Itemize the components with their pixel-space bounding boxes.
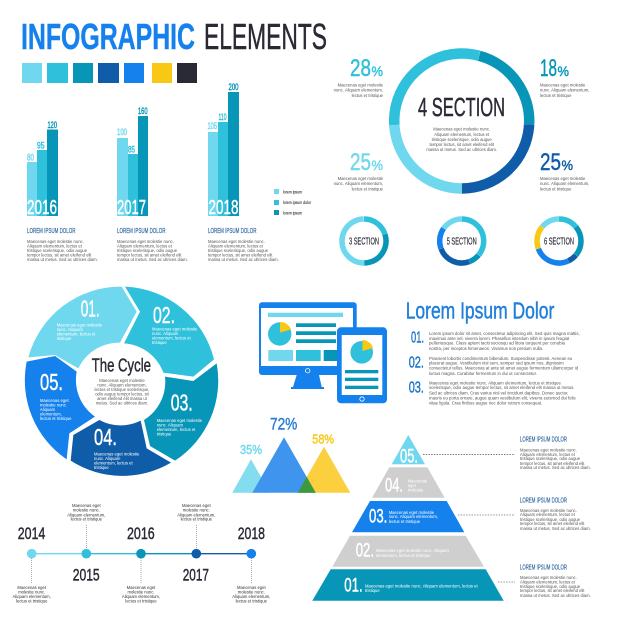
mountain chart: 35%	[240, 442, 262, 457]
donut centre text: tempor lectus, sit amet eleifend elit	[429, 142, 495, 147]
pyramid callout 3: massa ut metus. Sed ac ultrices diam.	[520, 593, 591, 598]
pyramid level 03	[352, 501, 464, 532]
donut centre text: Maecenas eget molestie nunc.	[433, 126, 490, 132]
colour palette swatches	[22, 63, 197, 83]
timeline: Maecenas eget	[17, 585, 47, 590]
timeline: molestie nunc.	[18, 590, 45, 595]
stat: 18%: nunc. Aliquam elementum,	[540, 88, 589, 92]
bar chart: 2016: 2016	[27, 197, 57, 219]
pyramid callout 3: Aliquam elementum, lectus et	[520, 580, 576, 584]
bar chart captions: tempor lectus, sit amet eleifend elit	[27, 252, 92, 258]
stat: 28%: 28	[350, 55, 371, 82]
numbered list: vitae ligula. Cras finibus augue nec dolor rutrum consequat.	[429, 400, 542, 406]
numbered list: scelerisque, odio augue tempor lectus, sit amet eleifend elit massa ut metus.	[429, 385, 574, 390]
donut centre text: 4 SECTION	[418, 92, 505, 122]
timeline: Aliquam elementum,	[232, 594, 270, 599]
pyramid callout 2: Maecenas eget molestie nunc.	[520, 508, 577, 513]
numbered list: 02.	[409, 355, 424, 372]
timeline: 2018	[238, 524, 265, 543]
timeline: molestie nunc.	[238, 590, 265, 595]
stat: 25% light: lectus et tristique	[352, 186, 384, 192]
numbered list: Sed ac ultrices diam. Cras varius nisl vel tincidunt dapibus. Donec auctor,	[429, 390, 568, 396]
stat: 18%: lectus et tristique	[540, 93, 572, 98]
chart legend: lorem ipsum dolor	[283, 200, 311, 205]
stat: 28%: nunc. Aliquam elementum,	[334, 88, 383, 92]
stat: 25% light	[334, 149, 384, 192]
cycle centre: metus. Sed ac ultrices diam.	[96, 400, 148, 406]
timeline: molestie nunc.	[183, 508, 210, 513]
pyramid level 02: Maecenas eget molestie nunc. Aliquam	[376, 548, 449, 553]
cycle centre: odio augue tempor lectus, sit	[95, 392, 150, 396]
timeline: lectus et tristique	[125, 599, 157, 604]
pyramid callout 1	[520, 437, 591, 470]
bar chart: 2016: 95	[37, 140, 44, 150]
stat: 18%	[540, 55, 589, 98]
timeline: molestie nunc.	[73, 508, 100, 513]
timeline: Aliquam elementum,	[13, 594, 51, 599]
cycle segment 01: elementum, lectus et	[57, 332, 96, 336]
pyramid level 04: Maecenas	[408, 478, 427, 484]
icon: desktop monitor	[259, 302, 357, 389]
timeline	[13, 503, 270, 604]
numbered list: luctus magna. Curabitur fermentum in dui ut consectetur.	[429, 371, 537, 376]
timeline: lectus et tristique	[71, 517, 103, 522]
cycle segment 04	[71, 420, 171, 476]
bar chart captions: Aliquam elementum, lectus et	[117, 244, 173, 248]
pyramid callout 1: LOREM IPSUM DOLOR	[520, 437, 567, 444]
stat: 25% dark: lectus et tristique	[540, 186, 572, 192]
bar chart: 2016: 80	[27, 152, 34, 162]
cycle centre: Maecenas eget molestie	[99, 378, 145, 383]
mountain chart: 58%	[312, 431, 334, 446]
numbered list: nostra, per inceptos himenaeos. Vivamus non pretium nulla.	[429, 346, 543, 351]
pyramid level 02	[332, 536, 484, 567]
pyramid level 03: Maecenas eget molestie	[389, 510, 435, 515]
timeline: lectus et tristique	[16, 599, 48, 604]
bar chart captions: Aliquam elementum, lectus et	[208, 244, 264, 248]
numbered list: 01.	[411, 330, 424, 347]
bar chart captions: Maecenas eget molestie nunc.	[27, 239, 84, 244]
timeline: Aliquam elementum,	[122, 594, 160, 599]
bar chart captions: Maecenas eget molestie nunc.	[117, 239, 174, 244]
cycle segment 01: 01.	[81, 296, 100, 322]
bar chart captions: massa ut metus. Sed ac ultrices diam.	[117, 257, 188, 262]
title: ELEMENTS	[204, 16, 327, 57]
cycle segment 05: molestie nunc.	[40, 402, 67, 408]
cycle segment 03: nunc. Aliquam	[157, 422, 184, 428]
cycle segment 03: 03.	[171, 390, 193, 416]
donut chart: 4 section	[379, 38, 544, 204]
bar chart captions: LOREM IPSUM DOLOR	[117, 228, 166, 235]
pyramid callout 3: Maecenas eget molestie nunc.	[520, 575, 577, 580]
mountain chart: 72%	[270, 414, 297, 433]
bar chart captions: tempor lectus, sit amet eleifend elit	[208, 252, 273, 258]
pyramid level 04: molestie	[408, 488, 424, 492]
timeline: molestie nunc.	[128, 590, 154, 595]
bar chart: 2017: 100	[117, 127, 127, 137]
bar chart captions: Aliquam elementum, lectus et	[27, 244, 83, 248]
bar chart captions: LOREM IPSUM DOLOR	[208, 228, 256, 235]
pyramid callout 3	[520, 564, 591, 598]
cycle diagram	[25, 287, 218, 476]
bar chart: 2018: 200	[228, 82, 238, 92]
cycle segment 04: Maecenas eget molestie	[94, 452, 140, 456]
timeline: Maecenas eget	[72, 503, 101, 508]
bar chart: 2018: 110	[218, 112, 226, 122]
pyramid level 01: tristique	[365, 588, 380, 593]
icon: tablet	[337, 327, 387, 403]
stat: 25% dark	[540, 149, 589, 192]
cycle segment 04: nunc. Aliquam	[94, 456, 121, 461]
donut: 3 section: 3 SECTION	[349, 236, 379, 248]
donut centre text: Aliquam elementum, lectus et	[434, 132, 490, 137]
cycle centre: amet eleifend elit massa ut	[97, 396, 148, 401]
stat: 28%	[334, 55, 384, 98]
bar chart captions: tristique scelerisque, odio augue	[208, 248, 269, 253]
cycle segment 02: nunc. Aliquam	[152, 331, 179, 336]
stat: 25% light: %	[372, 157, 383, 173]
pyramid level 02: 02.	[356, 541, 374, 562]
cycle centre: lectus et tristique scelerisque,	[95, 387, 149, 392]
cycle segment 04: 04.	[94, 424, 117, 450]
cycle segment 05: Maecenas eget	[40, 398, 69, 403]
pyramid callout 3: tempor lectus, sit amet eleifend elit	[520, 588, 585, 593]
bar chart captions: massa ut metus. Sed ac ultrices diam.	[27, 257, 98, 262]
bar chart: 2018	[208, 82, 239, 219]
pyramid callout 3: LOREM IPSUM DOLOR	[520, 564, 567, 571]
cycle centre: The Cycle	[92, 356, 151, 376]
pyramid level 05	[392, 435, 425, 467]
stat: 25% light: 25	[350, 149, 371, 176]
pyramid level 03: 03.	[369, 507, 387, 528]
cycle segment 05: Aliquam	[40, 407, 56, 412]
pyramid level 03: lectus et tristique	[389, 519, 421, 524]
pyramid callout 2: Aliquam elementum, lectus et	[520, 512, 576, 517]
cycle segment 04: elementum, lectus et	[94, 460, 133, 466]
bar chart: 2017: 160	[138, 106, 148, 116]
pyramid level 01: 01.	[344, 576, 363, 597]
chart legend: lorem ipsum	[283, 190, 302, 194]
pyramid level 05: 05.	[400, 446, 418, 467]
donut centre text: massa ut metus. Sed ac ultrices diam.	[426, 147, 497, 152]
donut: 3 section	[336, 213, 392, 269]
pyramid level 02: elementum, lectus et tristique	[376, 553, 431, 558]
timeline: Maecenas eget	[182, 503, 211, 508]
cycle segment 05: 05.	[40, 369, 63, 395]
numbered list	[409, 330, 580, 406]
numbered list: 03.	[409, 379, 424, 396]
pyramid level 04	[372, 467, 445, 498]
pyramid level 04: 04.	[385, 476, 403, 497]
bar chart: 2018: 2018	[208, 197, 238, 219]
chart legend: lorem ipsum	[283, 210, 302, 216]
timeline: Aliquam elementum,	[177, 512, 215, 517]
pyramid chart	[312, 435, 504, 601]
pyramid callout 1: Aliquam elementum, lectus et	[520, 452, 576, 457]
stat: 25% dark: 25	[540, 149, 561, 176]
donut: 6 section: 6 SECTION	[544, 236, 574, 248]
bar chart: 2016: 120	[48, 120, 57, 130]
pyramid callout 2: massa ut metus. Sed ac ultrices diam.	[520, 526, 591, 531]
stat: 25% light: Maecenas eget molestie	[338, 176, 384, 181]
heading: Lorem Ipsum Dolor: Lorem Ipsum Dolor	[406, 297, 555, 323]
numbered list: Lorem ipsum dolor sit amet, consectetur adipiscing elit. Sed quis magna mattis,	[429, 331, 580, 336]
pyramid callout 1: tempor lectus, sit amet eleifend elit	[520, 461, 585, 466]
pyramid level 03: nunc. Aliquam elementum,	[389, 514, 438, 519]
donut: 6 section	[528, 210, 590, 272]
bar chart captions: Maecenas eget molestie nunc.	[208, 239, 265, 244]
stat: 18%: %	[558, 63, 569, 79]
timeline: lectus et tristique	[236, 599, 268, 604]
pyramid callout 1: Maecenas eget molestie nunc.	[520, 448, 577, 452]
cycle centre	[92, 356, 151, 406]
pyramid callout 2: LOREM IPSUM DOLOR	[520, 497, 567, 504]
stat: 25% dark: nunc. Aliquam elementum,	[540, 181, 589, 186]
bar chart: 2017: 85	[128, 144, 135, 154]
numbered list: maximus ante vel, viverra lorem. Phasellus interdum nibh in ipsum feugiat	[429, 336, 570, 341]
timeline: lectus et tristique	[181, 517, 213, 522]
pyramid level 01: Maecenas eget molestie nunc. Aliquam elementum, lectus et	[365, 584, 478, 588]
bar chart: 2016	[27, 120, 58, 219]
timeline: Aliquam elementum,	[67, 512, 105, 517]
timeline: 2016	[127, 524, 155, 543]
stat: 18%: Maecenas eget molestie	[540, 82, 586, 88]
pyramid level 01	[312, 569, 504, 601]
timeline: 2014	[18, 524, 45, 543]
cycle segment 04: tristique	[94, 465, 109, 470]
stat: 25% dark: %	[562, 157, 573, 173]
cycle segment 05: elementum,	[40, 412, 62, 416]
cycle segment 02: elementum, lectus et	[152, 336, 191, 340]
stat: 28%: %	[372, 63, 383, 79]
stat: 25% light: nunc. Aliquam elementum,	[334, 181, 383, 186]
stat: 28%: lectus et tristique	[352, 93, 384, 98]
pyramid level 04: eget	[408, 483, 417, 488]
bar chart: 2017	[117, 106, 148, 219]
timeline: 2017	[183, 565, 209, 584]
mountain chart	[232, 414, 350, 493]
cycle segment 01: nunc. Aliquam	[57, 327, 84, 332]
donut: 5 section	[431, 210, 493, 272]
timeline: Maecenas eget	[237, 585, 266, 590]
cycle segment 05	[25, 356, 95, 459]
numbered list: pellentesque. Class aptent taciti sociosqu ad litora torquent per conubia	[429, 340, 566, 346]
bar chart captions: tristique scelerisque, odio augue	[27, 248, 88, 253]
numbered list: consectetur tellus. Maecenas at ante sit amet augue fermentum ullamcorper id	[429, 366, 579, 370]
pyramid callout 2	[520, 497, 591, 531]
timeline: Maecenas eget	[127, 585, 156, 590]
bar chart captions: massa ut metus. Sed ac ultrices diam.	[208, 257, 279, 262]
chart legend	[274, 189, 311, 216]
cycle segment 01	[28, 287, 137, 368]
bar chart captions: tristique scelerisque, odio augue	[117, 248, 178, 253]
pyramid callout 2: tristique scelerisque, odio augue	[520, 517, 581, 522]
bar chart: 2017: 2017	[117, 197, 146, 219]
cycle segment 03	[144, 363, 218, 461]
numbered list: placerat augue. Vestibulum nisl sem, semper sed ipsum nos, dignissim	[429, 360, 564, 366]
bar chart captions: tempor lectus, sit amet eleifend elit	[117, 252, 182, 258]
stat: 18%: 18	[540, 55, 557, 82]
pyramid callout 1: tristique scelerisque, odio augue	[520, 456, 581, 461]
cycle segment 01: tristique	[57, 336, 72, 341]
pyramid callout 2: tempor lectus, sit amet eleifend elit	[520, 521, 585, 526]
stat: 25% dark: Maecenas eget molestie	[540, 176, 586, 181]
bar chart: 2018: 105	[208, 121, 217, 131]
donut: 5 section: 5 SECTION	[447, 236, 477, 248]
bar chart captions: LOREM IPSUM DOLOR	[27, 228, 76, 235]
cycle segment 03: Maecenas eget molestie	[157, 418, 203, 423]
numbered list: mauris eu porta ornare, augue quam vestibulum elit, viverra euismod dui felis	[429, 396, 576, 400]
numbered list: Praesent lobortis condimentum bibendum. Suspendisse potenti. Aenean eu	[429, 356, 573, 361]
bar chart captions	[27, 228, 279, 262]
cycle segment 02: tristique	[152, 340, 167, 345]
donut centre text: tristique scelerisque, odio augue	[432, 137, 492, 142]
title: INFOGRAPHIC	[21, 16, 195, 57]
cycle segment 05: lectus et tristique	[40, 416, 72, 421]
cycle segment 03: tristique	[157, 432, 172, 436]
numbered list: Maecenas eget molestie nunc. Aliquam elementum, lectus et tristique	[429, 380, 561, 386]
stat: 28%: Maecenas eget molestie	[338, 82, 384, 88]
timeline: 2015	[73, 565, 100, 584]
cycle segment 01: Maecenas eget molestie	[57, 322, 103, 328]
donut centre text	[418, 92, 505, 152]
cycle segment 03: elementum, lectus et	[157, 427, 196, 432]
pyramid callout 1: massa ut metus. Sed ac ultrices diam.	[520, 465, 591, 470]
cycle segment 02: Maecenas eget molestie	[152, 326, 198, 332]
cycle centre: nunc. Aliquam elementum,	[97, 382, 147, 388]
cycle segment 02: 02.	[153, 302, 175, 328]
cycle segment 02	[124, 287, 214, 377]
pyramid callout 3: tristique scelerisque, odio augue	[520, 584, 581, 589]
